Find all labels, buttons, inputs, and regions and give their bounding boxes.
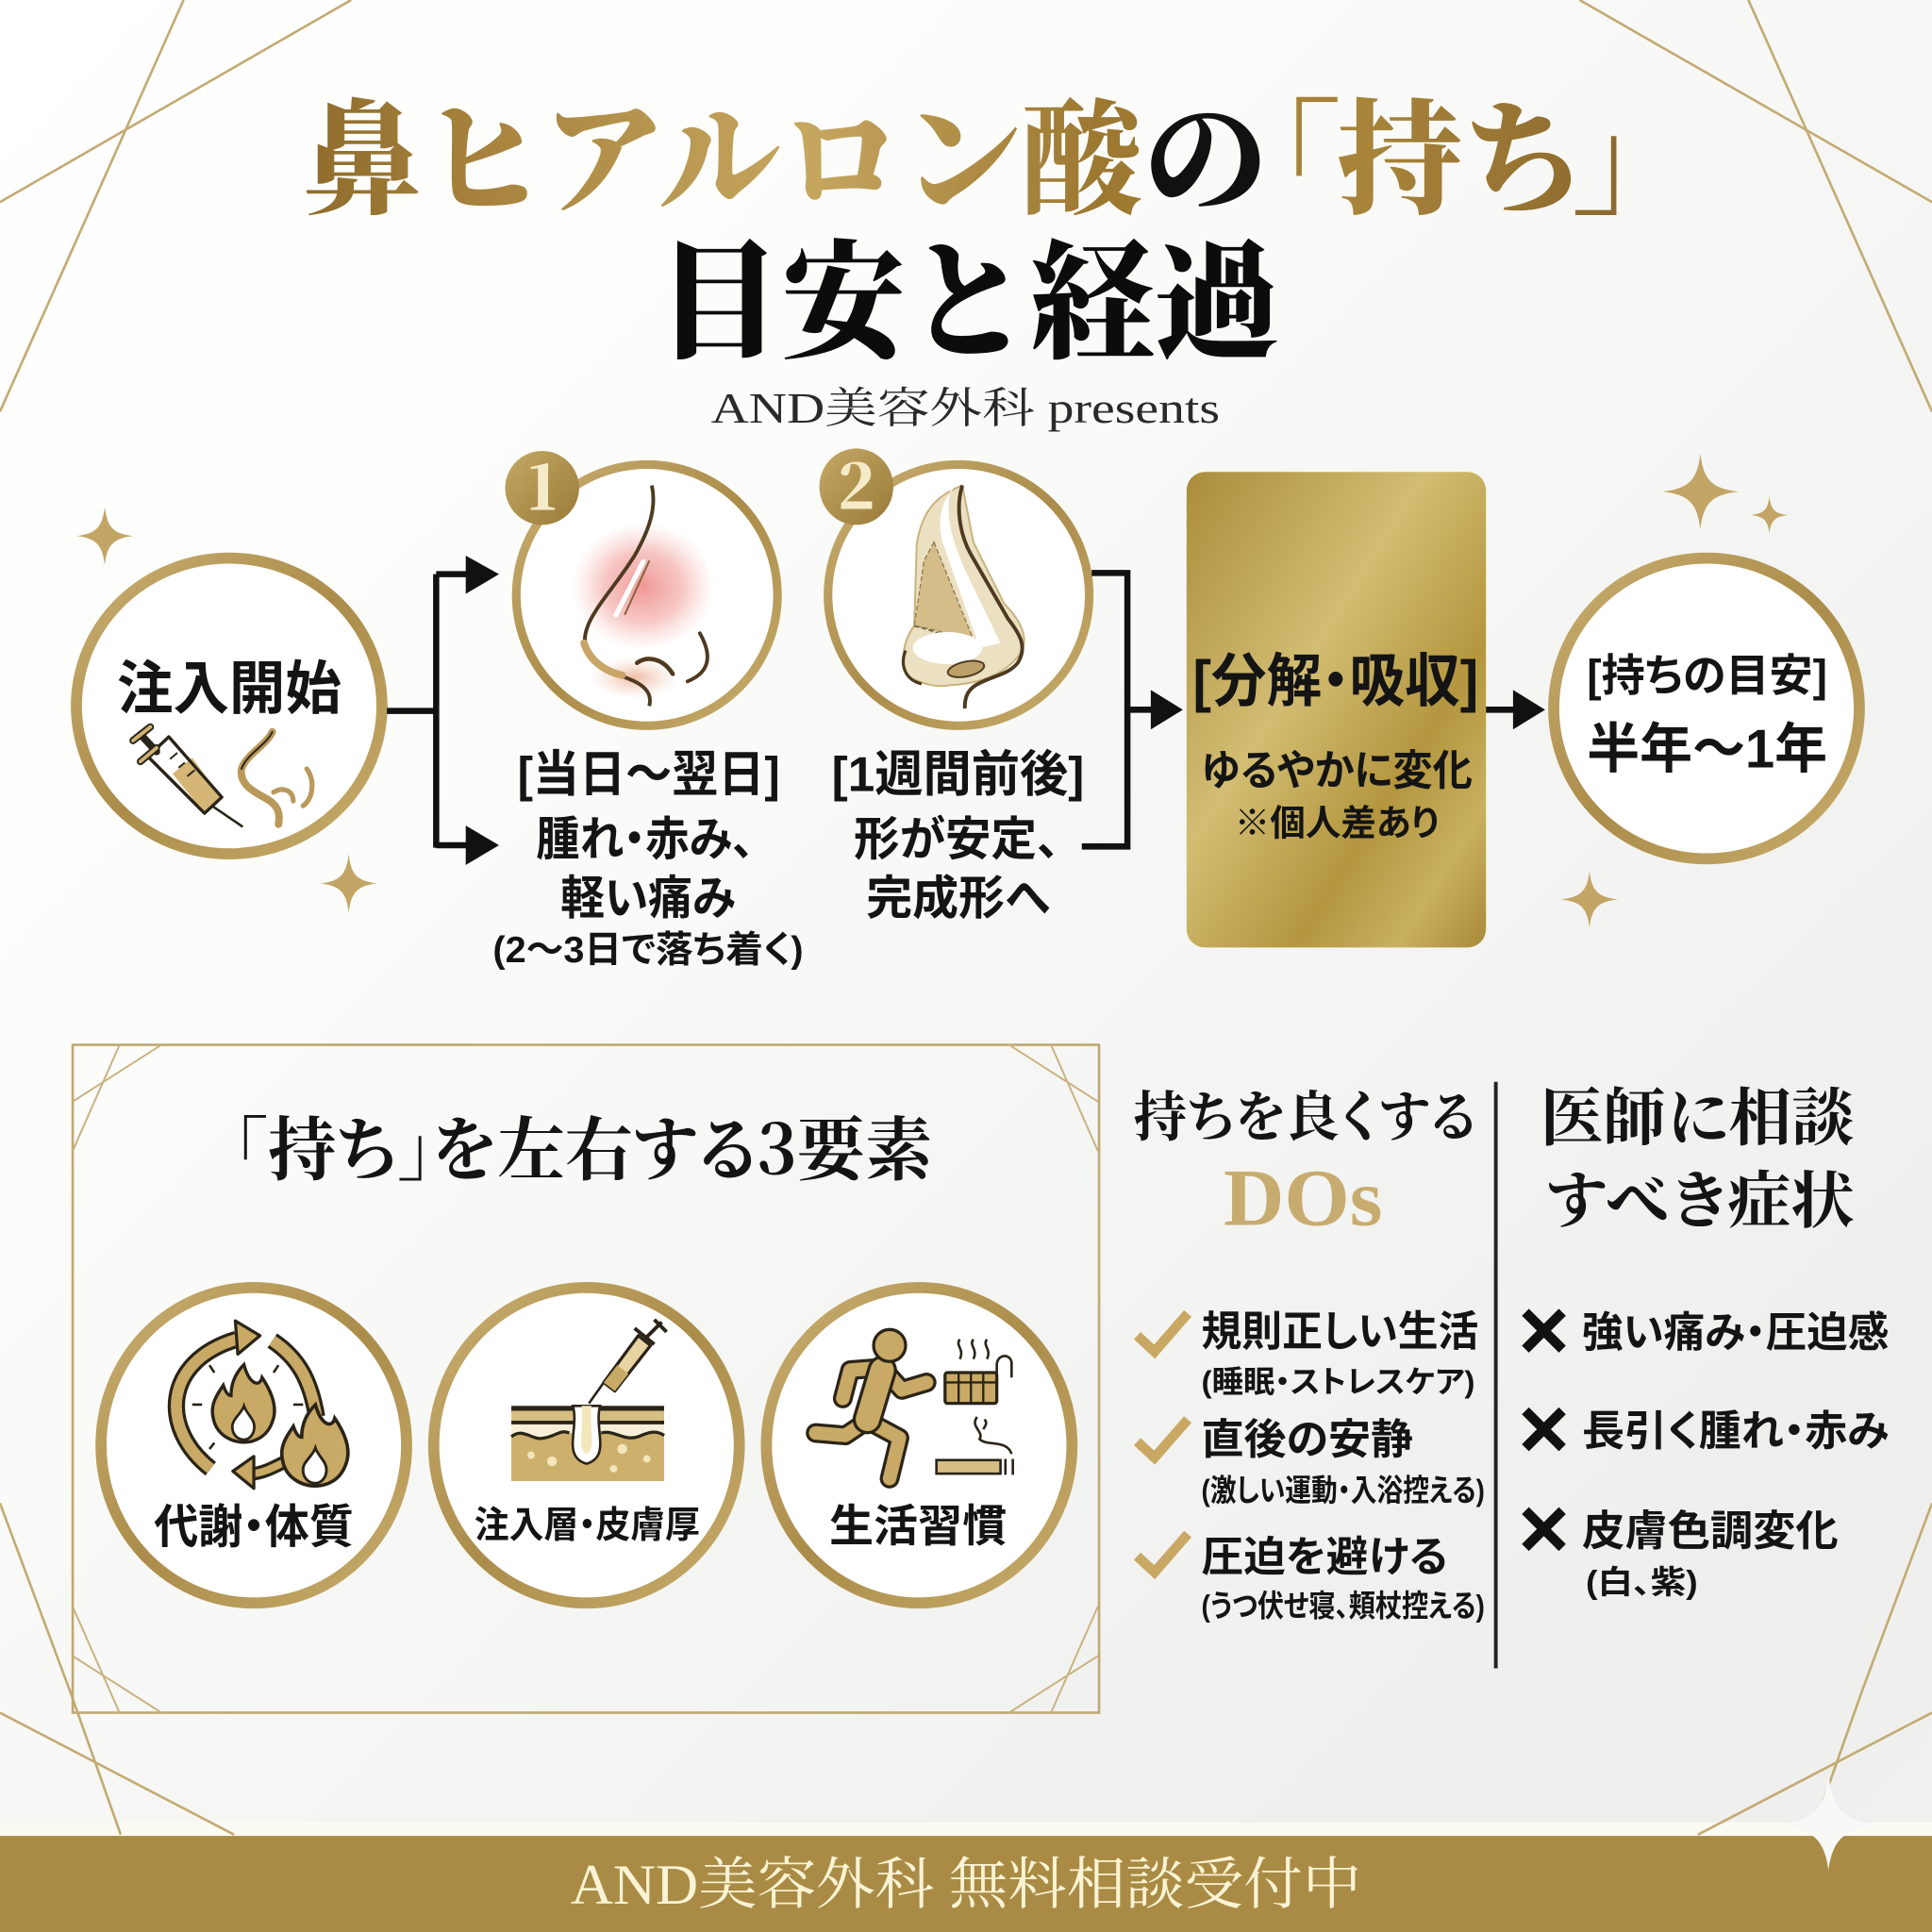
panel heading: 「持ち」を左右する3要素 — [234, 1095, 934, 1194]
item: regular lifestyle: (睡眠・ストレスケア) — [1201, 1364, 1474, 1399]
step 2 text: 完成形へ — [866, 872, 1050, 924]
icon: small nose — [242, 732, 312, 824]
item: skin color change: 皮膚色調変化 — [1582, 1508, 1839, 1555]
item: avoid pressure: 圧迫を避ける — [1201, 1534, 1448, 1580]
result: duration guideline — [1554, 558, 1859, 858]
factor: injection layer and skin thickness — [434, 1288, 740, 1603]
item: rest after: 直後の安静 — [1201, 1417, 1413, 1463]
factor: injection layer and skin thickness: 注入層・皮膚厚 — [475, 1506, 700, 1546]
badge 2: 2 — [838, 438, 875, 526]
connector: start to steps — [387, 556, 499, 865]
result: duration guideline: 半年〜1年 — [1587, 720, 1827, 780]
item: skin color change: (白、紫) — [1586, 1565, 1698, 1601]
item: regular lifestyle — [1138, 1308, 1478, 1399]
step 2 text: 形が安定、 — [854, 812, 1059, 865]
item: strong pain: 強い痛み・圧迫感 — [1582, 1310, 1889, 1357]
title: 鼻ヒアルロン酸 — [302, 60, 1150, 240]
step 2: about one week — [820, 438, 1090, 924]
icon: runner, sauna and cigarette — [816, 1329, 1013, 1478]
factor: lifestyle habits: 生活習慣 — [829, 1501, 1007, 1551]
step 1 text: 軽い痛み — [560, 872, 736, 924]
factor: metabolism: 代謝・体質 — [154, 1500, 354, 1553]
icon: syringe — [133, 727, 242, 826]
step 2 text — [832, 748, 1084, 924]
DOs heading: DOs — [1224, 1152, 1382, 1242]
connector: steps to absorption — [1082, 573, 1183, 846]
badge 1: 1 — [528, 440, 557, 528]
step: injection start: 注入開始 — [117, 657, 341, 722]
factor: lifestyle habits — [766, 1288, 1072, 1603]
factor: metabolism — [101, 1288, 407, 1603]
step: injection start — [76, 558, 382, 854]
sparkles — [76, 454, 1788, 928]
step 2 text: [1週間前後] — [832, 748, 1084, 803]
footer band: AND美容外科 無料相談受付中 — [571, 1853, 1361, 1916]
icon: swollen nose — [572, 486, 715, 706]
title: 「 — [1216, 60, 1341, 240]
column: DOs — [1134, 1074, 1485, 1624]
item: avoid pressure: (うつ伏せ寝、頬杖控える) — [1201, 1589, 1485, 1624]
title: の — [1143, 60, 1268, 240]
badge 2 — [820, 438, 893, 526]
column: symptoms to consult a doctor: すべき症状 — [1546, 1152, 1855, 1241]
title: 持ち — [1337, 60, 1586, 240]
step 1 text: 腫れ・赤み、 — [536, 812, 754, 865]
title: 」 — [1573, 60, 1697, 240]
arrow: absorption to duration — [1486, 690, 1545, 729]
item: avoid pressure — [1138, 1534, 1485, 1624]
badge 1 — [506, 440, 579, 528]
sparkle: footer corner — [1778, 1774, 1879, 1871]
column: symptoms to consult a doctor: 医師に相談 — [1541, 1068, 1856, 1158]
card: breakdown and absorption: ゆるやかに変化 — [1201, 748, 1473, 794]
result: duration guideline: [持ちの目安] — [1587, 651, 1827, 701]
column: symptoms to consult a doctor — [1525, 1068, 1889, 1601]
step 1 text: [当日〜翌日] — [518, 748, 780, 803]
panel: three factors — [73, 1045, 1099, 1713]
item: prolonged swelling: 長引く腫れ・赤み — [1582, 1408, 1889, 1455]
item: regular lifestyle: 規則正しい生活 — [1201, 1308, 1478, 1355]
footer band — [0, 1836, 1932, 1932]
icon: metabolism flames — [176, 1321, 348, 1489]
card: breakdown and absorption — [1187, 472, 1486, 947]
title: 目安と経過 — [657, 200, 1279, 384]
step 1 text: (2〜3日で落ち着く) — [492, 930, 804, 971]
icon: skin layers and syringe — [511, 1320, 667, 1481]
icon: nose cross-section — [904, 486, 1024, 708]
card: breakdown and absorption: ※個人差あり — [1235, 805, 1440, 844]
column: DOs: 持ちを良くする — [1134, 1074, 1476, 1152]
subtitle: AND美容外科 presents — [711, 384, 1220, 432]
step 1: same day to next day — [492, 440, 804, 971]
item: rest after — [1138, 1417, 1485, 1507]
title — [302, 60, 1697, 384]
step 1 text — [492, 748, 804, 971]
item: rest after: (激しい運動・入浴控える) — [1201, 1473, 1485, 1507]
card: breakdown and absorption: [分解・吸収] — [1192, 649, 1478, 714]
item: skin color change — [1525, 1508, 1839, 1601]
